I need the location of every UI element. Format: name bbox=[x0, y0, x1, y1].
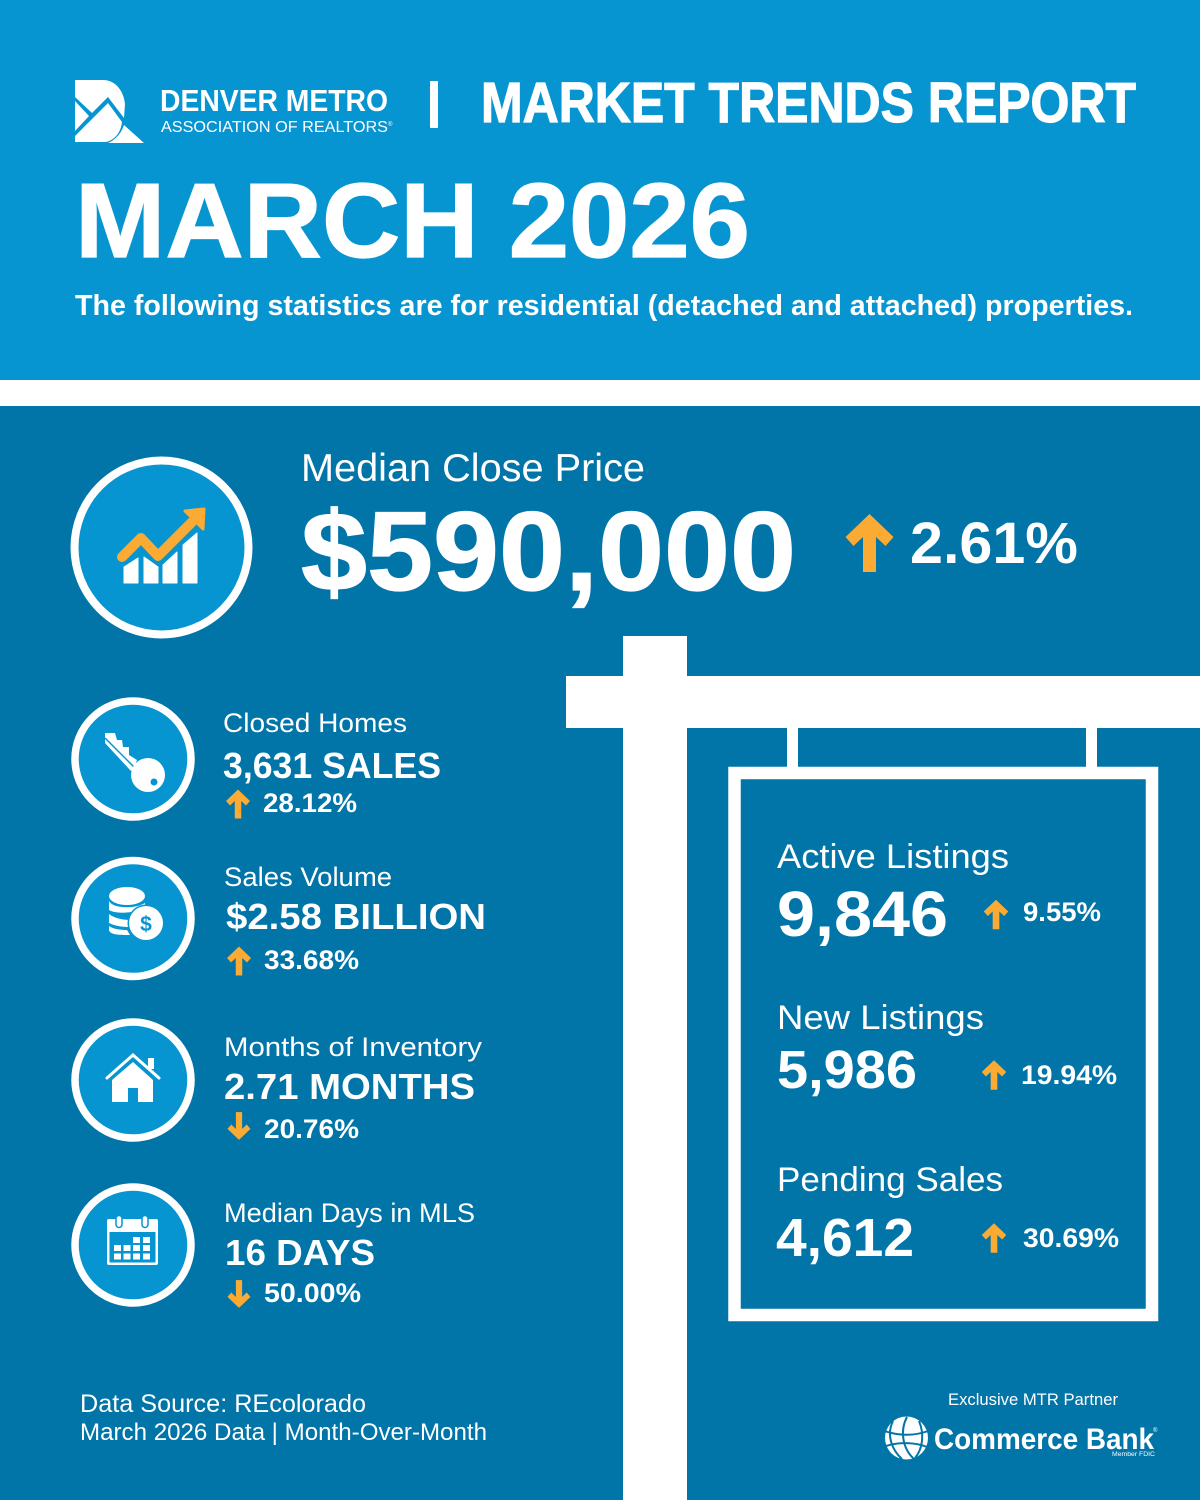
closed homes: 3,631 SALES bbox=[223, 745, 441, 786]
months of inventory: Months of Inventory bbox=[224, 1032, 483, 1062]
logo: Denver Metro Association of Realtors: DENVER METRO bbox=[160, 83, 388, 118]
new listings: 19.94% bbox=[1021, 1060, 1117, 1090]
subtitle: The following statistics are for residential (detached and attached) properties. bbox=[75, 290, 1133, 322]
partner logo: Commerce Bank: Exclusive MTR Partner bbox=[948, 1391, 1118, 1409]
logo: Denver Metro Association of Realtors bbox=[75, 80, 393, 143]
active listings: 9.55% bbox=[1023, 897, 1101, 927]
data source note bbox=[80, 1390, 487, 1446]
sales volume: Sales Volume bbox=[224, 862, 392, 892]
median days in MLS: Median Days in MLS bbox=[224, 1198, 475, 1228]
median close price: Median Close Price bbox=[301, 447, 645, 490]
icon: coins bbox=[75, 860, 191, 976]
partner logo: Commerce Bank: ® bbox=[1153, 1427, 1158, 1434]
icon: rising chart bbox=[74, 460, 248, 634]
active listings: 9,846 bbox=[777, 878, 948, 950]
sales volume: 33.68% bbox=[264, 945, 359, 975]
median close price bbox=[301, 447, 1078, 614]
closed homes bbox=[223, 708, 441, 818]
sign panel bbox=[734, 773, 1152, 1315]
icon: key bbox=[75, 701, 191, 817]
months of inventory: 2.71 MONTHS bbox=[224, 1066, 475, 1107]
sales volume bbox=[224, 862, 486, 976]
sales volume: $2.58 BILLION bbox=[226, 896, 486, 937]
data source note: March 2026 Data | Month-Over-Month bbox=[80, 1419, 487, 1446]
months of inventory: 20.76% bbox=[264, 1114, 359, 1144]
icon: coins: $ bbox=[140, 913, 152, 936]
new listings bbox=[777, 999, 1117, 1100]
partner logo: Commerce Bank bbox=[885, 1391, 1158, 1460]
main background panel bbox=[0, 406, 1200, 1500]
icon: house bbox=[75, 1022, 191, 1138]
logo: Denver Metro Association of Realtors: ASSOCIATION OF REALTORS bbox=[161, 119, 388, 136]
median days in MLS bbox=[224, 1198, 475, 1308]
closed homes: Closed Homes bbox=[223, 708, 407, 738]
partner logo: Commerce Bank: Member FDIC bbox=[1112, 1452, 1156, 1458]
active listings bbox=[777, 838, 1101, 950]
header divider bbox=[430, 81, 438, 128]
median days in MLS: 50.00% bbox=[264, 1278, 361, 1308]
pending sales: 4,612 bbox=[776, 1208, 914, 1268]
logo: Denver Metro Association of Realtors: ® bbox=[388, 121, 393, 128]
median days in MLS: 16 DAYS bbox=[225, 1232, 375, 1273]
active listings: Active Listings bbox=[777, 838, 1009, 876]
pending sales: 30.69% bbox=[1023, 1223, 1119, 1253]
partner logo: Commerce Bank: Commerce Bank bbox=[934, 1423, 1154, 1456]
pending sales: Pending Sales bbox=[777, 1161, 1003, 1199]
pending sales bbox=[776, 1161, 1119, 1268]
closed homes: 28.12% bbox=[263, 788, 357, 818]
for-sale sign post bbox=[566, 636, 1200, 1500]
data source note: Data Source: REcolorado bbox=[80, 1390, 366, 1418]
months of inventory bbox=[224, 1032, 483, 1144]
new listings: 5,986 bbox=[777, 1040, 917, 1100]
median close price: 2.61% bbox=[910, 511, 1078, 576]
median close price: $590,000 bbox=[301, 489, 796, 614]
month heading: MARCH 2026 bbox=[75, 162, 750, 280]
icon: calendar bbox=[75, 1187, 191, 1303]
new listings: New Listings bbox=[777, 999, 984, 1037]
header band bbox=[0, 0, 1200, 380]
